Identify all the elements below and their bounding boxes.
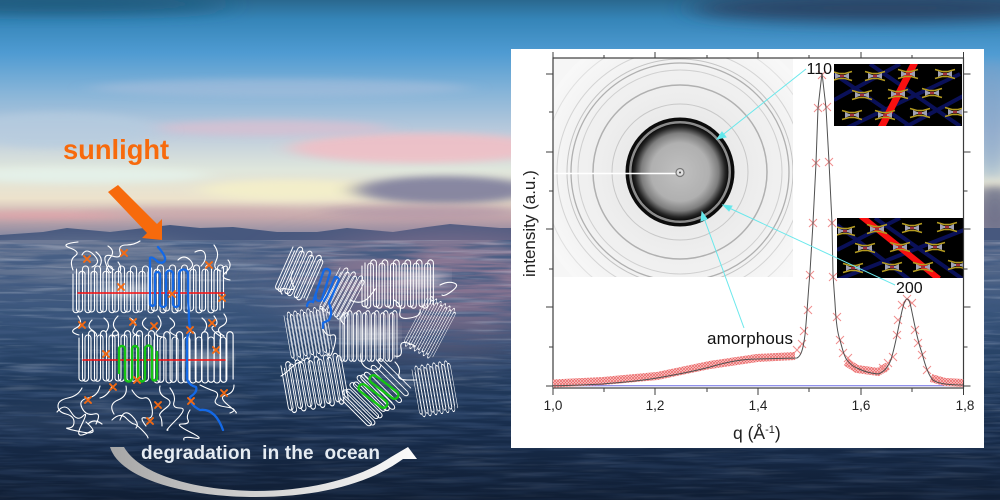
inset: 200 lattice plane (837, 218, 963, 278)
curved arrow: degradation (110, 447, 417, 497)
amorphous chains (57, 241, 236, 440)
x-axis title: ) (775, 423, 781, 443)
red lines (78, 293, 225, 360)
blue chain fragment (307, 269, 339, 328)
tie chains (280, 271, 457, 380)
lamella: lower crystalline block (79, 331, 233, 383)
baseline (553, 385, 963, 387)
x-axis tick labels: 1,6 (852, 398, 870, 413)
semicrystalline polymer before degradation (57, 241, 236, 440)
background: distant hills (0, 224, 1000, 241)
y-axis title: intensity (a.u.) (520, 170, 539, 277)
x-axis tick labels: 1,2 (646, 398, 664, 413)
lamella: upper crystalline block (73, 265, 224, 313)
peak labels: 110 (806, 61, 832, 78)
green chain (119, 346, 157, 382)
blue chain (150, 247, 223, 430)
x-axis title: q (Å (733, 423, 765, 443)
x-axis tick labels: 1,0 (544, 398, 562, 413)
background: sea (0, 235, 1000, 500)
panel: WAXS chart: 200 (896, 280, 923, 297)
panel: WAXS chart: amorphous (707, 329, 793, 348)
panel: WAXS chart (511, 22, 984, 448)
cyan callout arrows (701, 69, 895, 328)
x-axis tick labels (544, 398, 974, 413)
green chain fragment (357, 374, 400, 409)
x-axis tick labels: 1,8 (956, 398, 974, 413)
fit curve (553, 73, 963, 386)
XRD diffraction pattern (554, 58, 793, 277)
heading: sunlight: sunlight (63, 134, 169, 165)
axes (546, 52, 970, 395)
fragmented crystalline blocks after degradation (274, 244, 458, 428)
arrow: sunlight (108, 185, 162, 240)
x-axis title: -1 (765, 424, 775, 436)
inset: 110 lattice plane (834, 64, 962, 126)
background: sunset sky (0, 0, 1000, 242)
x-axis tick labels: 1,4 (749, 398, 768, 413)
label: degradation in the ocean: degradation in the ocean (141, 443, 380, 464)
orange crosses: photo-degradation sites (79, 250, 227, 424)
data markers (553, 71, 963, 384)
